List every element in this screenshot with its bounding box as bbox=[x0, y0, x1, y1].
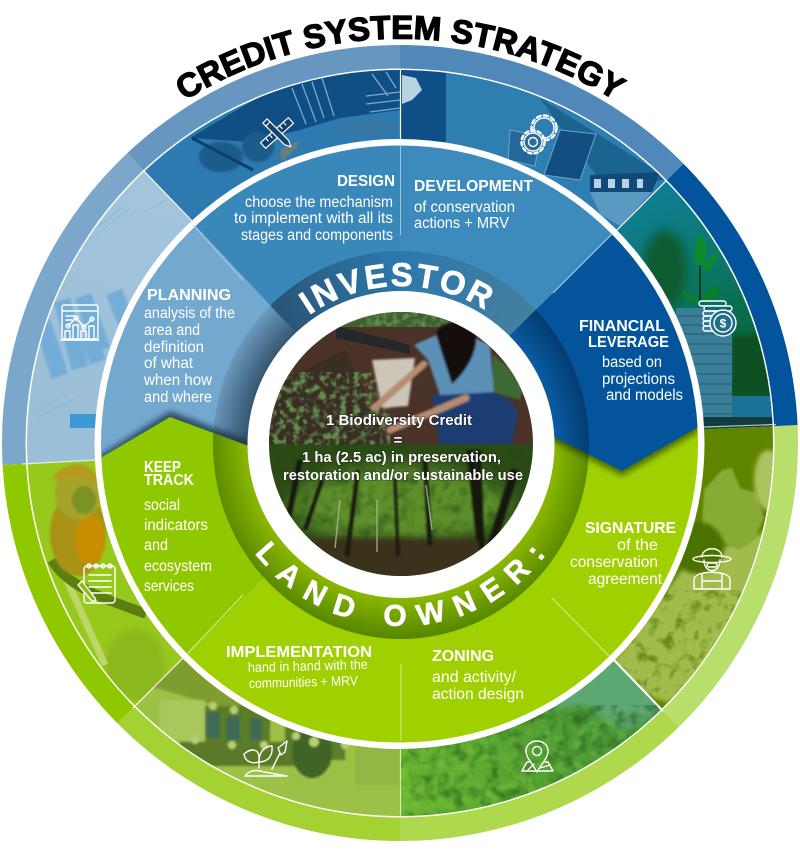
center photo: woman planting seedlings bbox=[269, 312, 533, 576]
icon: seedling and trowel bbox=[244, 741, 287, 776]
photo: design meeting bbox=[144, 70, 400, 222]
text: keep track: and bbox=[144, 537, 168, 554]
panel: implementation sector bbox=[188, 552, 400, 742]
text: financial leverage: FINANCIAL bbox=[579, 318, 665, 335]
text: keep track: ecosystem bbox=[144, 558, 212, 575]
photo: farmer's soil and plants bbox=[615, 426, 773, 708]
text: keep track: services bbox=[144, 578, 194, 595]
icon: chart dashboard bbox=[61, 305, 99, 340]
center text: credit definition: 1 ha (2.5 ac) in preservation, bbox=[302, 450, 501, 466]
text: planning bbox=[143, 287, 235, 406]
photo: monkey on branch bbox=[28, 460, 182, 706]
panel: keep track sector bbox=[101, 417, 291, 654]
white ring around step sectors bbox=[94, 139, 704, 749]
text: planning: analysis of the bbox=[144, 305, 235, 322]
center text: credit definition bbox=[283, 413, 523, 484]
icon: pencil and ruler bbox=[261, 118, 293, 149]
panel: zoning sector bbox=[400, 554, 609, 742]
text: planning: and where bbox=[144, 389, 212, 406]
panel: planning sector bbox=[101, 226, 296, 460]
text: zoning: ZONING bbox=[432, 648, 494, 665]
heading: LAND OWNER: LAND OWNER: bbox=[255, 540, 545, 626]
photo: forest canopy bbox=[401, 661, 660, 816]
text: planning: definition bbox=[144, 339, 204, 356]
text: signature: conservation bbox=[570, 554, 658, 571]
center text: credit definition: = bbox=[394, 433, 402, 449]
icon: farmer bbox=[693, 549, 731, 589]
title: CREDIT SYSTEM STRATEGY bbox=[177, 15, 628, 98]
text: implementation: IMPLEMENTATION bbox=[226, 644, 372, 661]
text: keep track: TRACK bbox=[144, 472, 194, 489]
text: keep track: KEEP bbox=[144, 459, 181, 476]
text: planning: PLANNING bbox=[147, 287, 231, 304]
text: development: of conservation bbox=[414, 199, 515, 216]
text: financial leverage: based on bbox=[602, 354, 662, 371]
shadow of blue chevron bbox=[554, 428, 698, 479]
panel: signature sector bbox=[508, 400, 698, 656]
text: zoning: action design bbox=[432, 686, 524, 703]
text: zoning bbox=[432, 648, 524, 703]
panel: financial leverage sector bbox=[510, 234, 698, 471]
text: design bbox=[234, 173, 395, 244]
text: implementation: communities + MRV bbox=[249, 673, 358, 691]
text: planning: of what bbox=[144, 355, 194, 372]
icon: coins: $ bbox=[720, 316, 727, 330]
heading: INVESTOR: INVESTOR bbox=[298, 262, 492, 314]
text: financial leverage bbox=[579, 318, 683, 404]
text: implementation bbox=[226, 644, 372, 691]
text: signature: of the bbox=[617, 537, 658, 554]
text: planning: when how bbox=[143, 372, 213, 389]
photo: development tablets bbox=[401, 70, 666, 230]
text: implementation: hand in hand with the bbox=[248, 657, 368, 675]
icon: notepad bbox=[78, 564, 115, 603]
text: signature bbox=[570, 520, 676, 588]
text: development bbox=[414, 178, 533, 232]
photo: community group bbox=[136, 658, 400, 816]
text: development: DEVELOPMENT bbox=[414, 178, 533, 195]
text: planning: area and bbox=[144, 322, 200, 339]
photo: financial sapling and coins bbox=[617, 182, 773, 430]
text: keep track: indicators bbox=[144, 517, 208, 534]
icon: coins bbox=[699, 301, 736, 336]
panel: development sector bbox=[400, 146, 612, 336]
text: design: to implement with all its bbox=[234, 210, 393, 227]
text: financial leverage: projections bbox=[602, 371, 675, 388]
text: financial leverage: LEVERAGE bbox=[588, 334, 669, 351]
text: financial leverage: and models bbox=[606, 387, 683, 404]
text: signature: SIGNATURE bbox=[585, 520, 676, 537]
thin dividers between sectors bbox=[188, 146, 613, 741]
text: signature: agreement bbox=[588, 571, 663, 588]
center text: credit definition: restoration and/or sustainable use bbox=[283, 468, 523, 484]
text: design: stages and components bbox=[241, 227, 393, 244]
icon: gears bbox=[522, 116, 556, 154]
text: zoning: and activity/ bbox=[432, 669, 517, 686]
shadow of green chevron bbox=[102, 408, 248, 458]
center text: credit definition: 1 Biodiversity Credit bbox=[326, 413, 472, 429]
icon: map pin bbox=[522, 741, 553, 772]
text: design: choose the mechanism bbox=[245, 194, 393, 211]
text: design: DESIGN bbox=[337, 173, 395, 190]
text: keep track: social bbox=[144, 497, 180, 514]
photo: planning chart bbox=[27, 172, 191, 464]
panel: design sector bbox=[196, 146, 400, 333]
white ring around center bbox=[248, 291, 554, 598]
text: keep track bbox=[144, 459, 212, 595]
text: development: actions + MRV bbox=[414, 215, 510, 232]
